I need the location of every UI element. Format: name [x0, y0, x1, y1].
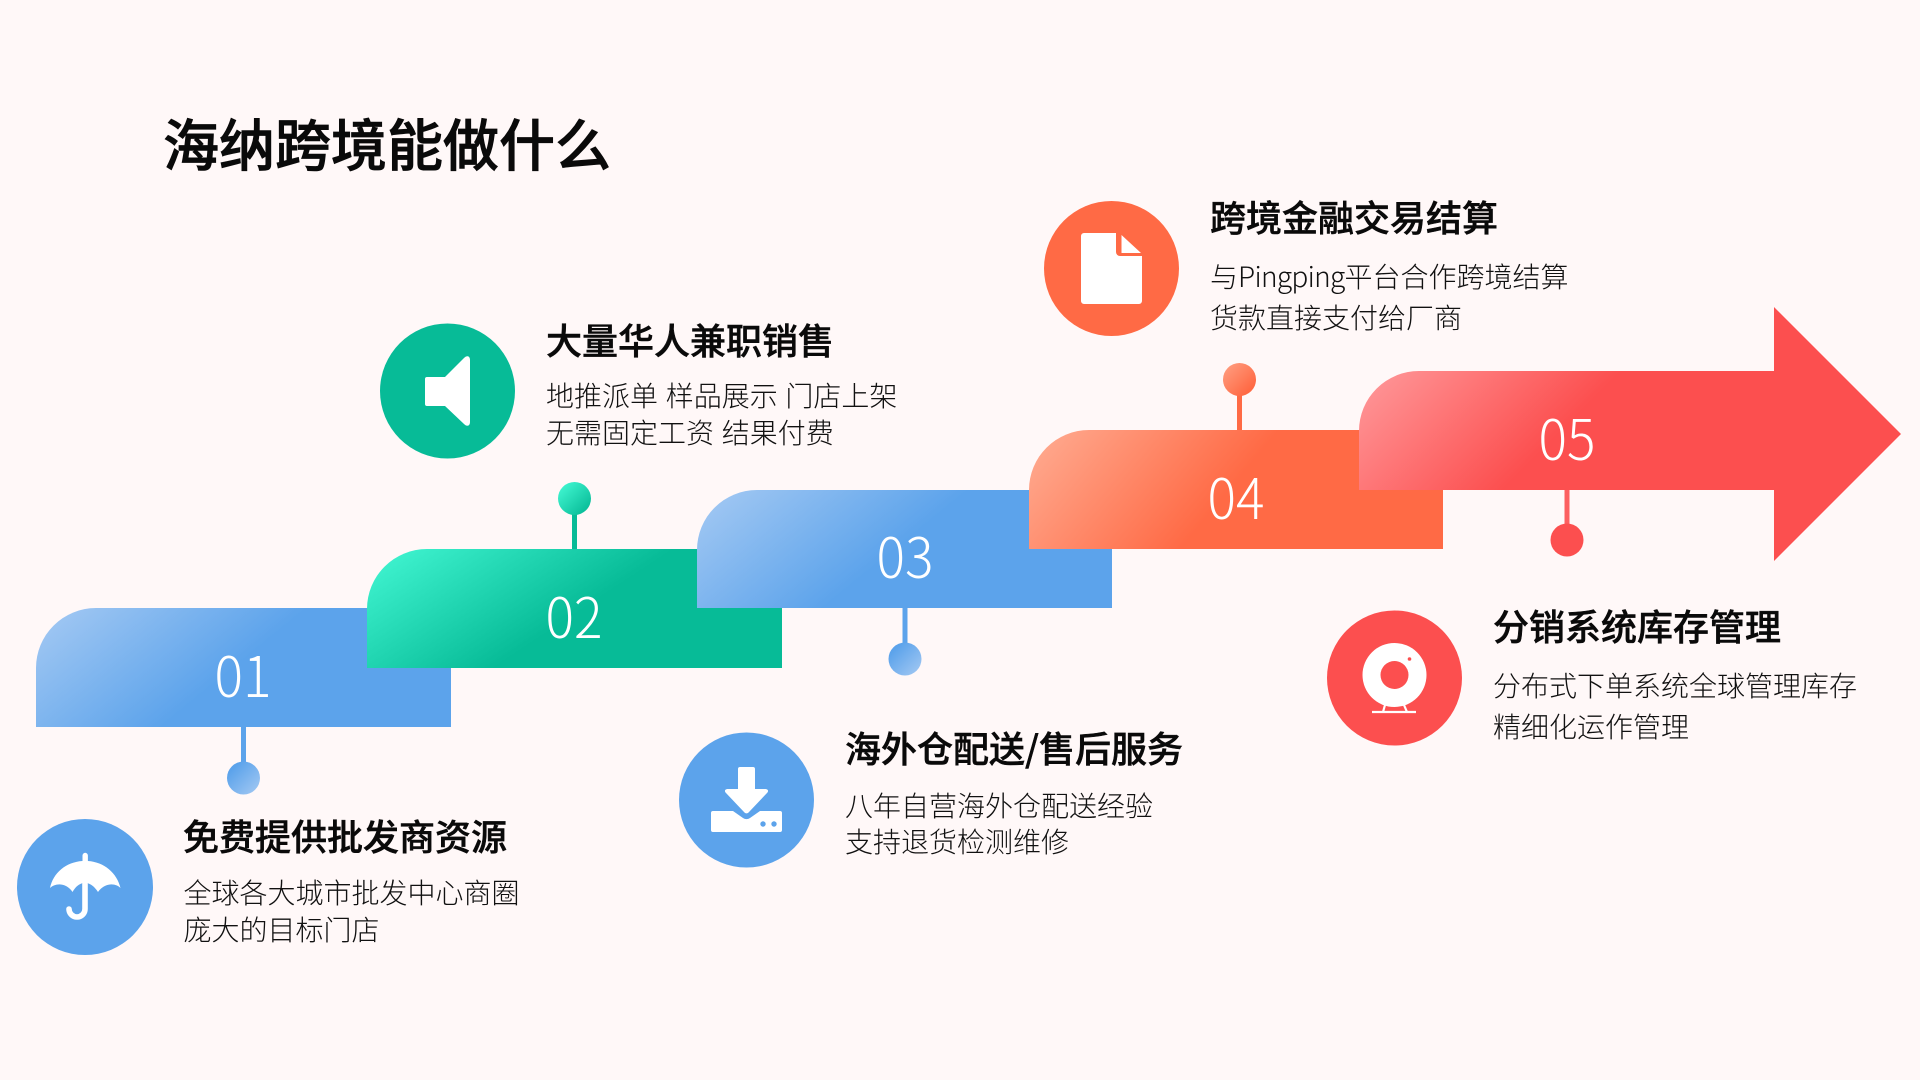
step 02 heading: 大量华人兼职销售 [546, 313, 834, 365]
step 03 heading: 海外仓配送/售后服务 [845, 721, 1183, 773]
step 04 heading: 跨境金融交易结算 [1210, 190, 1498, 242]
step 01 heading: 免费提供批发商资源 [183, 809, 507, 861]
step 01 banner: 01 [214, 633, 272, 714]
step 01 description: 庞大的目标门店 [184, 909, 380, 949]
step 05 heading: 分销系统库存管理 [1493, 599, 1781, 651]
step 05 description: 精细化运作管理 [1493, 706, 1689, 746]
step 02 description: 地推派单 样品展示 门店上架 [546, 375, 897, 415]
step 05 description [1493, 665, 1857, 746]
step 03 description [845, 785, 1153, 861]
step 05 arrow banner [1359, 307, 1901, 561]
step 02 description: 无需固定工资 结果付费 [546, 412, 834, 452]
icon: download to tray [679, 732, 814, 868]
step 04 connector pin [1223, 363, 1256, 430]
icon: webcam [1327, 610, 1462, 746]
step 01 description [184, 872, 520, 949]
icon: umbrella [17, 819, 153, 955]
step 05 connector pin [1550, 490, 1584, 556]
step 02 description [546, 375, 897, 452]
step 05 description: 分布式下单系统全球管理库存 [1493, 665, 1857, 705]
title: 海纳跨境能做什么 [163, 102, 611, 183]
step 04 description: 货款直接支付给厂商 [1210, 297, 1462, 337]
step 03 description: 八年自营海外仓配送经验 [845, 785, 1153, 825]
step 05 arrow banner: 05 [1538, 396, 1596, 477]
step 04 description [1210, 256, 1569, 337]
step 02 banner [367, 549, 782, 668]
step 03 banner: 03 [876, 514, 934, 595]
step 03 connector pin [888, 608, 922, 676]
step 04 description: 与Pingping平台合作跨境结算 [1210, 256, 1569, 296]
icon: speaker [380, 324, 515, 458]
step 01 connector pin [227, 727, 260, 794]
step 03 description: 支持退货检测维修 [845, 821, 1069, 861]
step 04 banner: 04 [1208, 455, 1264, 536]
step 01 description: 全球各大城市批发中心商圈 [184, 872, 520, 912]
step 03 banner [697, 490, 1112, 608]
icon: document [1044, 201, 1179, 336]
step 04 banner [1029, 430, 1443, 549]
step 01 banner [36, 608, 451, 727]
step 02 banner: 02 [546, 574, 602, 655]
step 02 connector pin [558, 482, 591, 549]
